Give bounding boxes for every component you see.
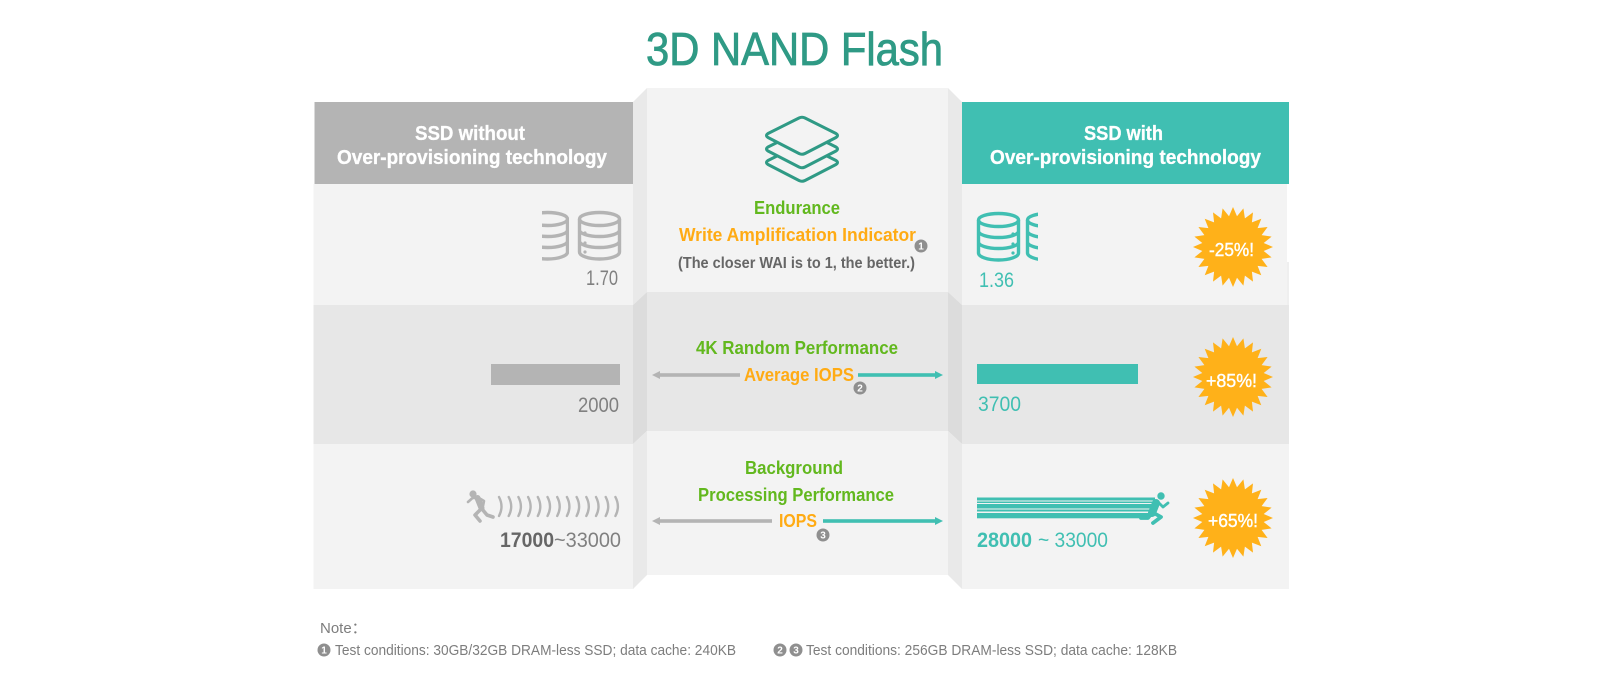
- heading: background processing: IOPS: [779, 511, 817, 531]
- header: without: [314, 102, 633, 184]
- icon: runner teal: [1141, 492, 1168, 523]
- value: 3700: 3700: [978, 393, 1021, 416]
- footnotes: Test conditions: 256GB DRAM-less SSD; data cache: 128KB: [806, 643, 1177, 659]
- heading: 4K random performance: [696, 338, 898, 394]
- bar: 2000: [491, 364, 620, 385]
- title: 3D NAND Flash: [646, 23, 943, 75]
- header: with: Over-provisioning technology: [990, 147, 1262, 169]
- speed lines teal: [977, 498, 1155, 518]
- value: 28000 ~ 33000: [977, 529, 1108, 552]
- value: 2000: 2000: [578, 394, 619, 417]
- value: 1.36: 1.36: [979, 269, 1014, 292]
- heading: 4K random performance: Average IOPS: [744, 365, 854, 385]
- panel: center bevels: [633, 88, 962, 589]
- value: 17000~33000: 17000: [500, 529, 554, 552]
- heading: background processing: 3: [820, 530, 826, 542]
- value: 28000 ~ 33000: 28000: [977, 529, 1032, 552]
- icon: runner grey: [468, 490, 493, 521]
- badge: +85%: +85%!: [1206, 371, 1257, 391]
- badge: +65%: [1193, 478, 1273, 558]
- panel: SSD with over-provisioning: [962, 102, 1289, 589]
- header: with: SSD with: [1084, 123, 1163, 145]
- value: 17000~33000: ~33000: [554, 529, 621, 552]
- heading: background processing: Processing Performance: [698, 485, 894, 505]
- panel: center metrics: [647, 88, 948, 575]
- icon: storage drives grey: [528, 212, 620, 259]
- bar: 3700: [977, 364, 1138, 384]
- panel: SSD without over-provisioning: [314, 102, 634, 589]
- arrow: right teal: [823, 517, 943, 525]
- header: without: Over-provisioning technology: [337, 147, 608, 169]
- badge: +85%: [1193, 337, 1273, 417]
- heading: endurance: [678, 198, 928, 272]
- heading: endurance: (The closer WAI is to 1, the better.): [678, 255, 915, 272]
- heading: 4K random performance: 2: [857, 384, 863, 394]
- footnotes: Note：: [320, 620, 367, 637]
- speed arcs grey: [499, 497, 618, 516]
- heading: endurance: Write Amplification Indicator: [679, 225, 916, 245]
- header: without: SSD without: [415, 123, 525, 145]
- value: 1.70: 1.70: [586, 267, 618, 290]
- footnotes: 2: [777, 646, 783, 656]
- heading: 4K random performance: 4K Random Performance: [696, 338, 898, 358]
- footnotes: 3: [793, 646, 799, 656]
- heading: endurance: Endurance: [754, 198, 840, 218]
- footnotes: 1: [321, 646, 327, 656]
- value: 17000~33000: [500, 529, 621, 552]
- icon: storage drives teal: [976, 212, 1038, 262]
- arrow: left grey: [652, 371, 740, 379]
- header: with: [962, 102, 1289, 184]
- heading: background processing: [698, 458, 894, 542]
- arrow: right teal: [858, 371, 943, 379]
- heading: endurance: 1: [918, 242, 924, 252]
- badge: -25%: [1193, 207, 1273, 287]
- value: 28000 ~ 33000: ~ 33000: [1038, 529, 1108, 552]
- badge: +65%: +65%!: [1208, 511, 1258, 531]
- arrow: left grey: [652, 517, 772, 525]
- footnotes: Test conditions: 30GB/32GB DRAM-less SSD; data cache: 240KB: [335, 643, 736, 659]
- footnotes: [318, 620, 1177, 659]
- badge: -25%: -25%!: [1209, 240, 1254, 260]
- heading: background processing: Background: [745, 458, 843, 478]
- icon: layers: [766, 117, 838, 181]
